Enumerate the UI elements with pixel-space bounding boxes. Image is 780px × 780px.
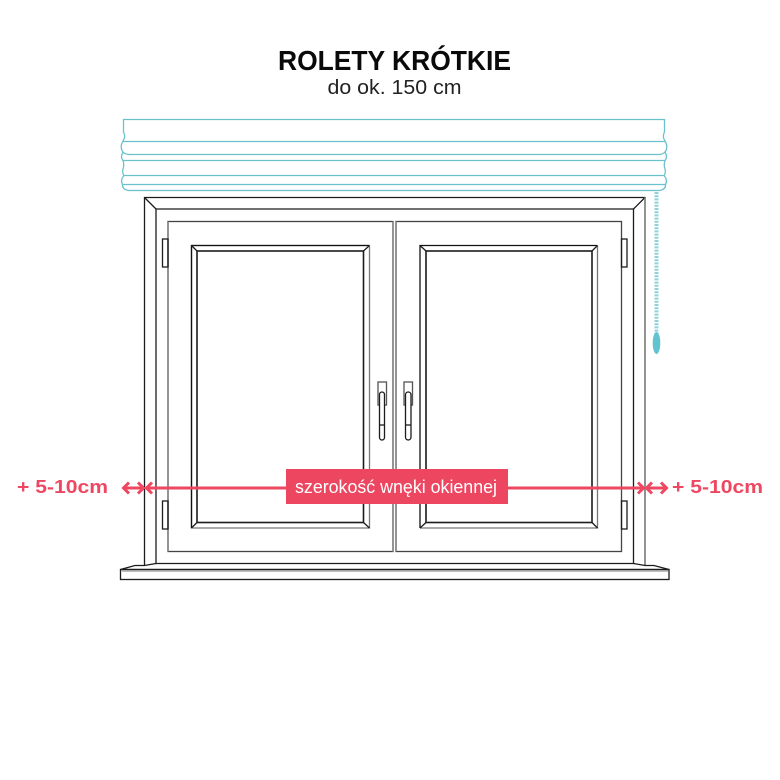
title: ROLETY KRÓTKIE <box>278 45 511 76</box>
blind cord and pull <box>653 192 660 354</box>
right label: + 5-10cm <box>672 476 763 497</box>
left handle <box>378 382 386 440</box>
right handle <box>404 382 412 440</box>
width label <box>286 469 508 504</box>
hinges <box>162 239 627 529</box>
window outer frame <box>144 198 645 565</box>
window sill <box>120 564 669 580</box>
window <box>120 198 669 580</box>
right sash <box>396 222 622 552</box>
left extra arrow <box>124 482 144 494</box>
roller blind <box>121 120 667 190</box>
left label: + 5-10cm <box>17 476 108 497</box>
left sash <box>168 222 393 552</box>
width label: szerokość wnęki okiennej <box>295 477 497 497</box>
right extra arrow <box>646 482 666 494</box>
width arrow <box>146 482 644 494</box>
cord pull <box>653 332 660 354</box>
subtitle: do ok. 150 cm <box>328 77 462 99</box>
